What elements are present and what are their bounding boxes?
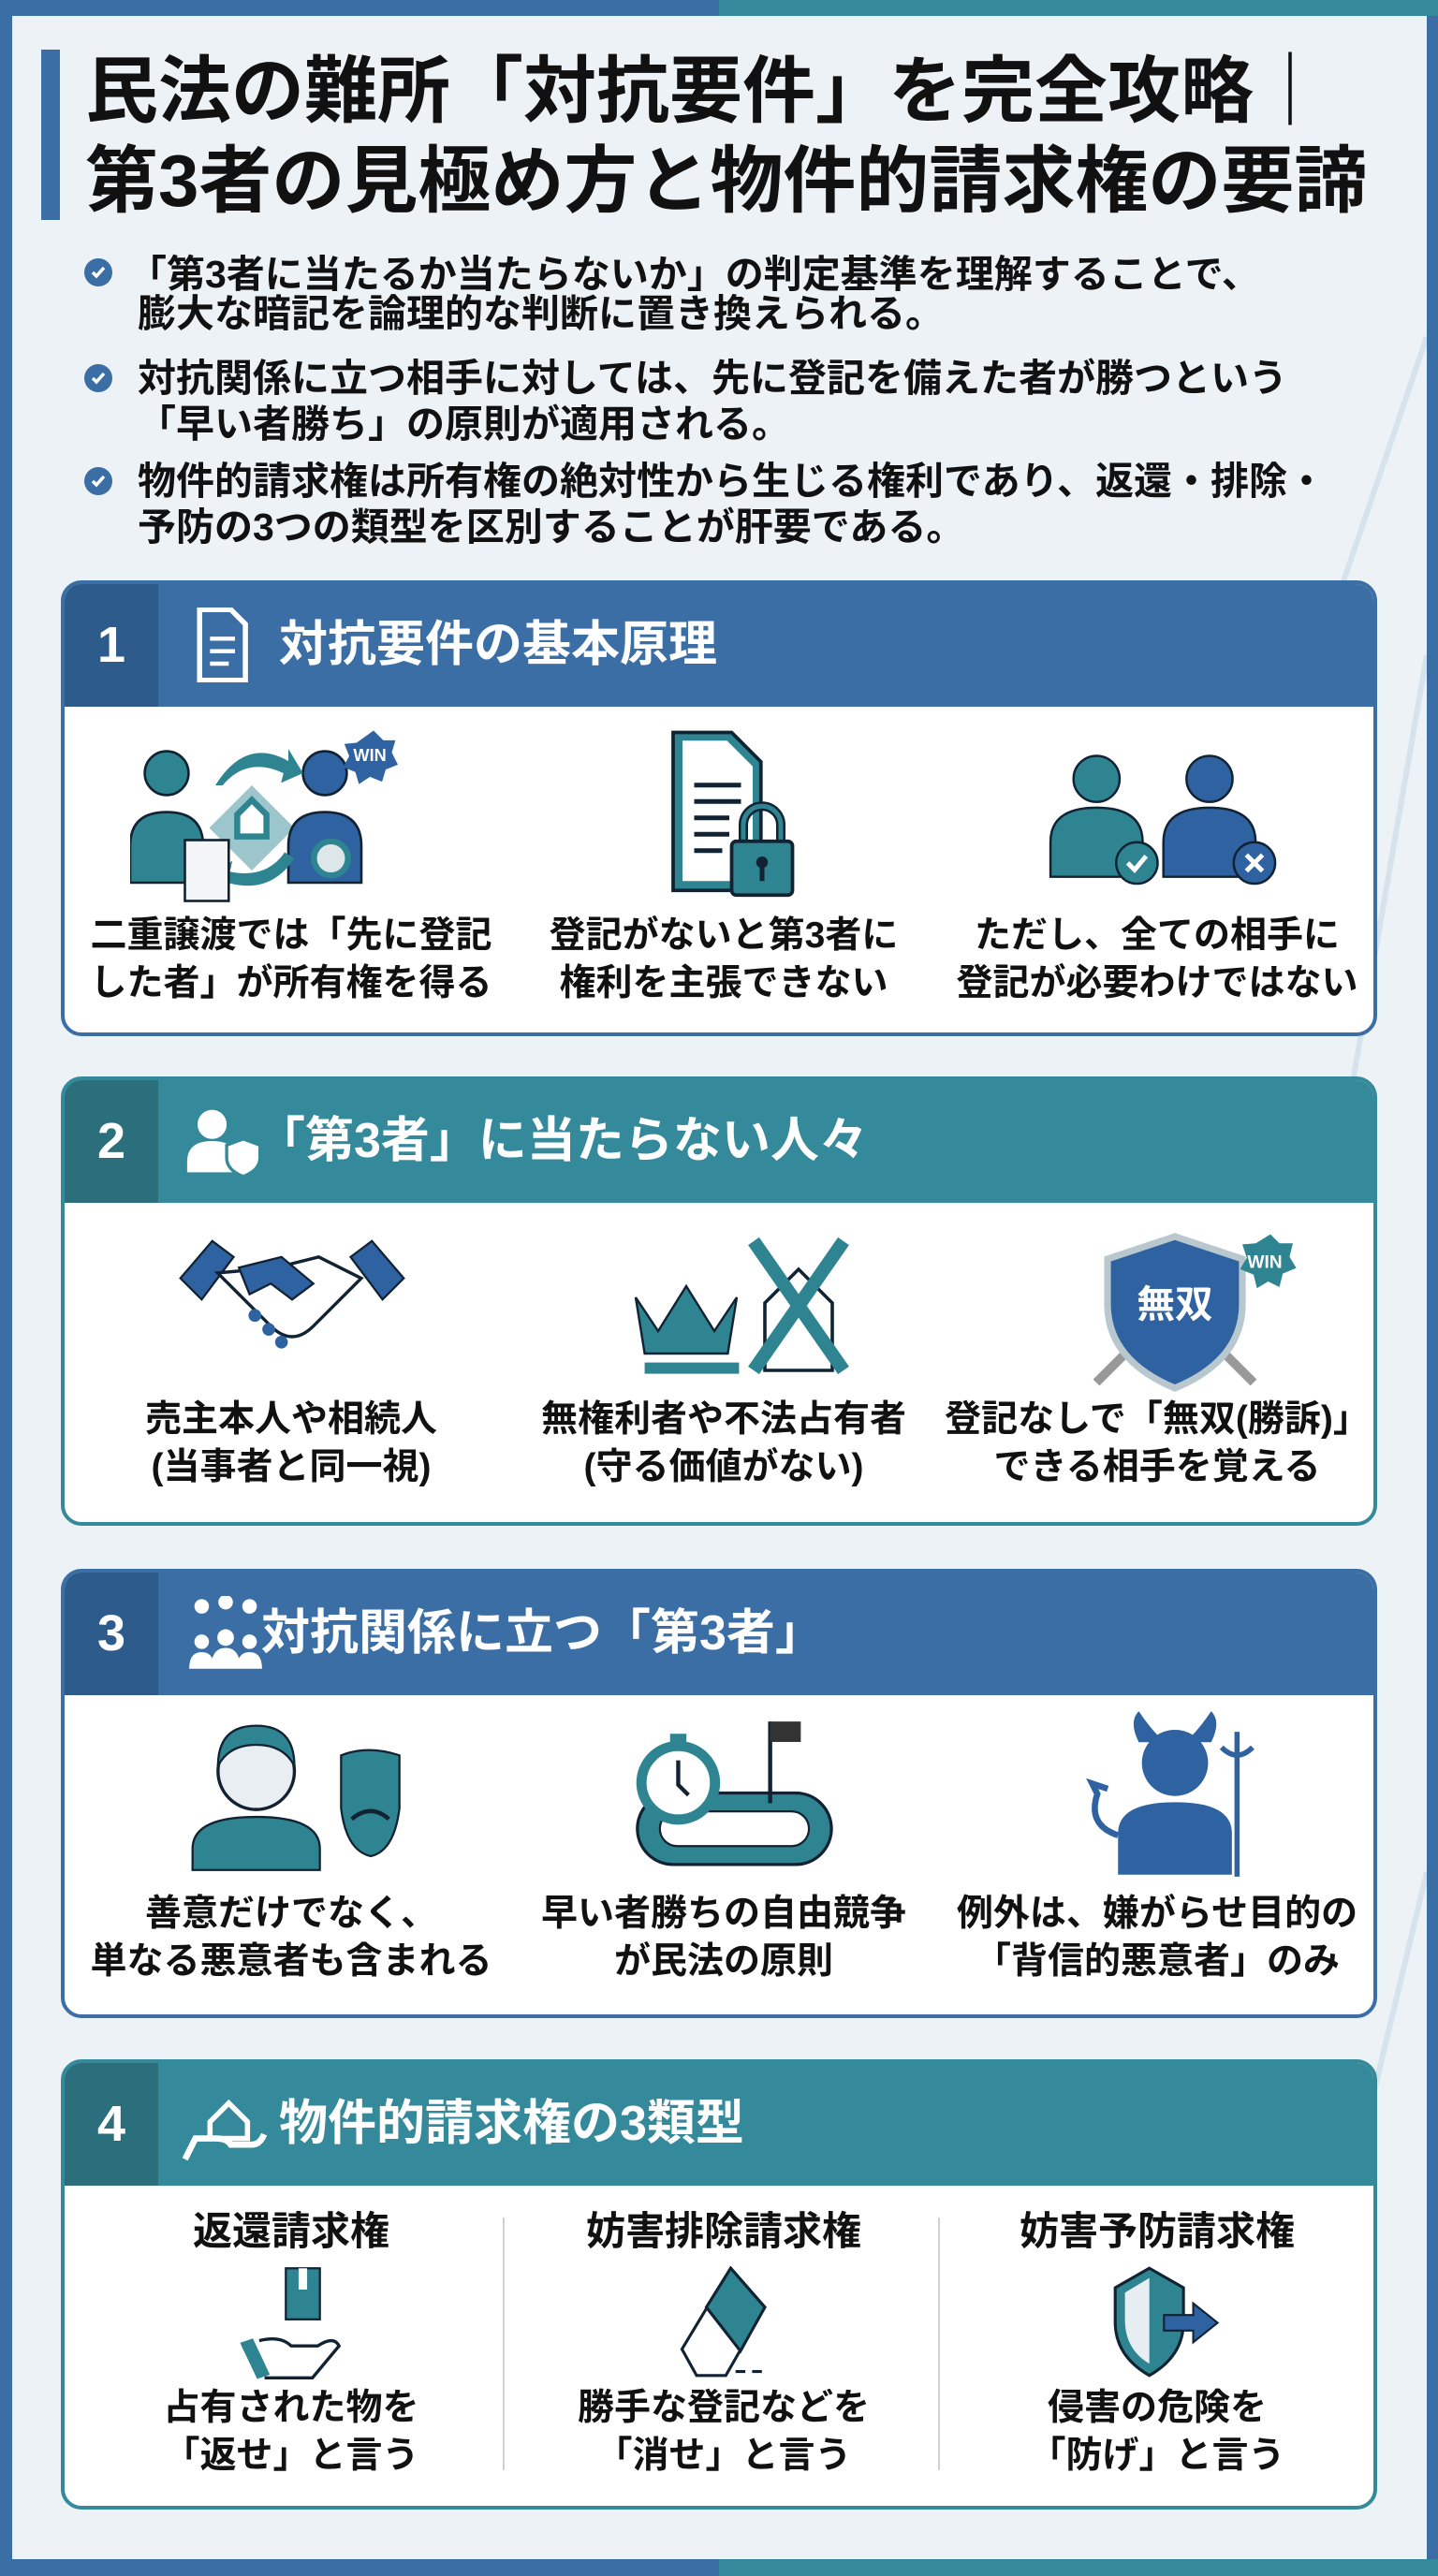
caption 2-2: (守る価値がない) bbox=[584, 1447, 863, 1487]
bullet 3 bbox=[84, 460, 1326, 549]
column: return: 占有された物を bbox=[163, 2388, 419, 2428]
icon: eraser bbox=[680, 2266, 767, 2378]
caption 3-1: 善意だけでなく、 bbox=[145, 1894, 437, 1934]
icon: group with questions bbox=[189, 1596, 262, 1669]
title: 第3者の見極め方と物件的請求権の要諦 bbox=[85, 139, 1367, 222]
icon: devil bbox=[1086, 1711, 1255, 1877]
caption 2-3: できる相手を覚える bbox=[993, 1447, 1321, 1487]
column: prevention bbox=[1020, 2209, 1295, 2476]
bullet 2: 「早い者勝ち」の原則が適用される。 bbox=[138, 402, 790, 446]
header 2 bbox=[65, 1080, 1373, 1203]
caption 3-2 bbox=[541, 1894, 906, 1982]
caption 1-3: 登記が必要わけではない bbox=[956, 963, 1357, 1003]
bullet 1 bbox=[84, 253, 1260, 335]
bullet 2: 対抗関係に立つ相手に対しては、先に登記を備えた者が勝つという bbox=[138, 357, 1287, 400]
caption 1-2: 登記がないと第3者に bbox=[550, 915, 898, 956]
header 1: 1 bbox=[97, 617, 125, 673]
column: return: 「返せ」と言う bbox=[163, 2436, 419, 2476]
column: removal: 勝手な登記などを bbox=[578, 2388, 870, 2428]
caption 2-2: 無権利者や不法占有者 bbox=[541, 1399, 906, 1440]
icon: crown and crossed house bbox=[635, 1237, 849, 1374]
title: 民法の難所「対抗要件」を完全攻略｜ bbox=[85, 50, 1327, 132]
caption 3-3: 例外は、嫌がらせ目的の bbox=[957, 1894, 1357, 1934]
caption 1-3 bbox=[956, 915, 1357, 1003]
column: prevention: 妨害予防請求権 bbox=[1020, 2209, 1295, 2253]
header 3: 3 bbox=[97, 1605, 125, 1661]
caption 2-1 bbox=[145, 1399, 437, 1487]
icon: house on hand bbox=[182, 2099, 268, 2160]
caption 2-2 bbox=[541, 1399, 906, 1487]
bullet 1: 膨大な暗記を論理的な判断に置き換えられる。 bbox=[138, 292, 944, 335]
caption 3-1 bbox=[90, 1894, 492, 1982]
icon: shield with arrow bbox=[1114, 2266, 1219, 2378]
caption 1-3: ただし、全ての相手に bbox=[975, 915, 1340, 956]
caption 1-2 bbox=[550, 915, 898, 1003]
decorative diagonals bbox=[1341, 336, 1427, 2090]
bullet 3: 物件的請求権は所有権の絶対性から生じる権利であり、返還・排除・ bbox=[138, 460, 1326, 503]
dividers bbox=[503, 2217, 505, 2470]
bullet 3: 予防の3つの類型を区別することが肝要である。 bbox=[138, 505, 964, 549]
caption 3-3: 「背信的悪意者」のみ bbox=[975, 1941, 1340, 1982]
column: removal bbox=[578, 2209, 870, 2476]
icon: shield muso: WIN bbox=[1247, 1253, 1283, 1273]
icon: check and cross persons bbox=[1049, 754, 1277, 886]
header 2: 2 bbox=[97, 1113, 125, 1169]
caption 2-1: 売主本人や相続人 bbox=[145, 1399, 437, 1440]
caption 1-1: した者」が所有権を得る bbox=[90, 963, 492, 1003]
caption 2-3: 登記なしで「無双(勝訴)」 bbox=[945, 1399, 1370, 1440]
column: removal: 「消せ」と言う bbox=[595, 2436, 852, 2476]
panel 3 bbox=[61, 1569, 1377, 2018]
bullet 2 bbox=[84, 357, 1287, 446]
panel 4 bbox=[61, 2059, 1377, 2510]
panel 2 bbox=[61, 1076, 1377, 1526]
caption 3-2: 早い者勝ちの自由競争 bbox=[541, 1894, 906, 1934]
icon: person and mask bbox=[191, 1724, 401, 1871]
header 2: 「第3者」に当たらない人々 bbox=[257, 1114, 868, 1168]
caption 3-1: 単なる悪意者も含まれる bbox=[90, 1941, 492, 1982]
icon: double transfer bbox=[130, 730, 398, 902]
icon: double transfer: WIN bbox=[353, 746, 387, 765]
header 3: 対抗関係に立つ「第3者」 bbox=[261, 1606, 824, 1661]
caption 1-1 bbox=[90, 915, 492, 1003]
caption 1-1: 二重譲渡では「先に登記 bbox=[90, 915, 492, 956]
caption 2-3 bbox=[945, 1399, 1370, 1487]
column: prevention: 「防げ」と言う bbox=[1029, 2436, 1284, 2476]
caption 2-1: (当事者と同一視) bbox=[152, 1447, 431, 1487]
icon: shield muso bbox=[1093, 1233, 1296, 1392]
caption 3-3 bbox=[957, 1893, 1357, 1982]
header 4 bbox=[65, 2063, 1373, 2186]
bullet 1: 「第3者に当たるか当たらないか」の判定基準を理解することで、 bbox=[128, 253, 1260, 296]
icon: document bbox=[197, 607, 248, 682]
column: return: 返還請求権 bbox=[193, 2209, 389, 2253]
bullet list bbox=[84, 253, 1326, 549]
icon: stopwatch race track bbox=[636, 1721, 833, 1866]
column: removal: 妨害排除請求権 bbox=[586, 2209, 861, 2253]
title bbox=[41, 50, 1367, 222]
icon: hand with box bbox=[240, 2267, 341, 2379]
header 4: 物件的請求権の3類型 bbox=[279, 2097, 744, 2151]
panel 1 bbox=[61, 580, 1377, 1036]
column: prevention: 侵害の危険を bbox=[1048, 2388, 1267, 2428]
header 3 bbox=[65, 1573, 1373, 1695]
header 4: 4 bbox=[97, 2096, 125, 2152]
column: return bbox=[163, 2209, 419, 2476]
header 1 bbox=[65, 584, 1373, 707]
caption 3-2: が民法の原則 bbox=[614, 1941, 833, 1982]
caption 1-2: 権利を主張できない bbox=[559, 963, 888, 1003]
icon: shield muso: 無双 bbox=[1137, 1273, 1213, 1328]
icon: document with lock bbox=[671, 730, 794, 897]
icon: handshake bbox=[179, 1239, 405, 1349]
background frame bbox=[719, 0, 1438, 16]
header 1: 対抗要件の基本原理 bbox=[279, 618, 717, 672]
icon: person with shield bbox=[187, 1110, 258, 1175]
